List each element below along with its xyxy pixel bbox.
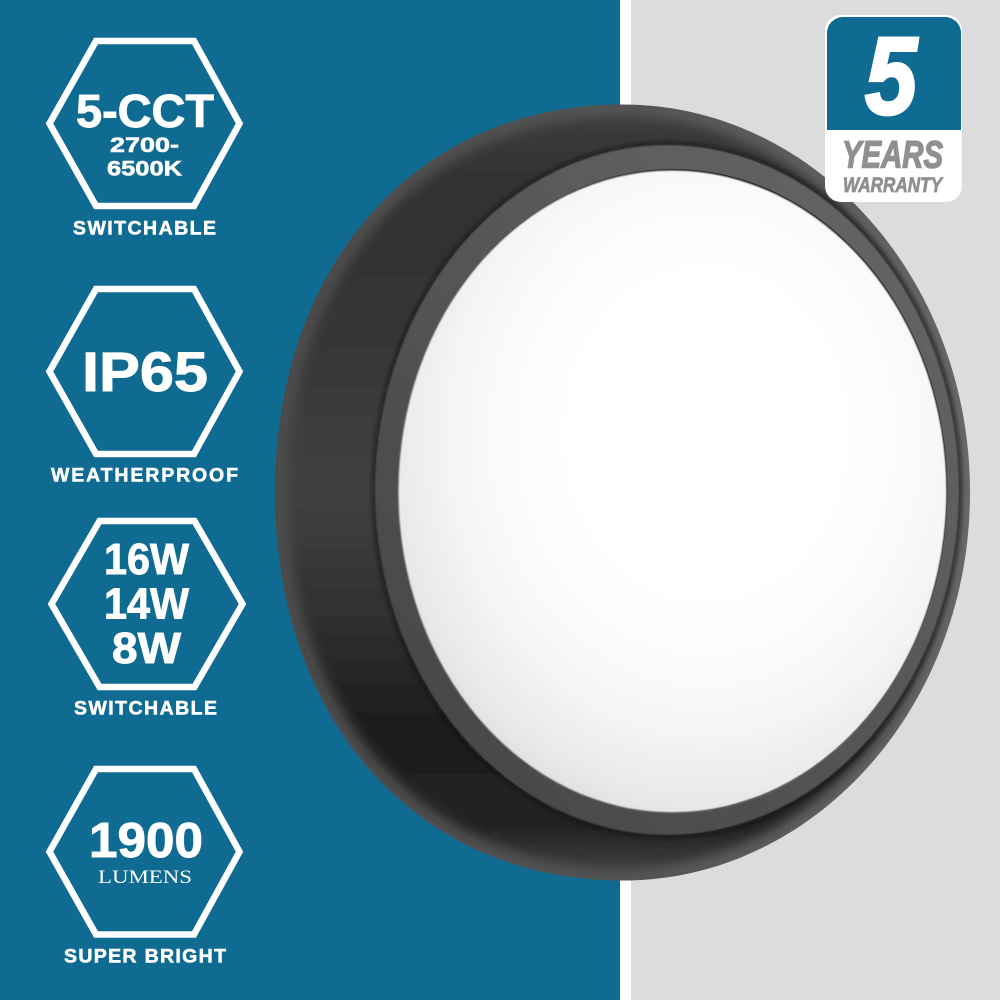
main value: IP65: [82, 340, 208, 403]
badge warranty: WARRANTY: [843, 174, 944, 197]
product image: round bulkhead light: [270, 100, 975, 885]
lamp bezel: [375, 145, 959, 835]
badge: 5 years warranty: [825, 15, 962, 202]
wattage 14W: 14W: [104, 580, 189, 628]
main value: 5-CCT: [76, 85, 214, 137]
unit: LUMENS: [98, 867, 192, 888]
badge years: YEARS: [842, 134, 943, 176]
caption: SUPER BRIGHT: [64, 946, 226, 968]
panel: grey background: [631, 0, 1000, 1000]
caption: SWITCHABLE: [74, 698, 217, 720]
colour range line 2: 6500K: [107, 158, 182, 180]
hexagon: [52, 521, 242, 687]
wattage 16W: 16W: [104, 535, 189, 584]
hexagon: [50, 41, 240, 206]
lamp lens edge line: [398, 169, 948, 813]
white divider strip: [620, 0, 631, 1000]
panel: blue background: [0, 0, 620, 1000]
wattage 8W: 8W: [112, 624, 181, 673]
colour range line 1: 2700-: [110, 134, 179, 157]
badge number: 5: [865, 15, 919, 138]
feature: IP65: [50, 289, 240, 486]
caption: WEATHERPROOF: [51, 464, 238, 486]
badge white card: [825, 15, 962, 202]
hexagon: [50, 289, 240, 454]
feature: wattage: [52, 521, 242, 720]
caption: SWITCHABLE: [73, 218, 216, 240]
lamp diffuser lens: [398, 170, 946, 812]
lamp housing: [270, 100, 975, 885]
main value: 1900: [89, 814, 203, 868]
feature: 5-CCT: [50, 41, 240, 240]
hexagon: [50, 769, 240, 934]
feature: lumens: [50, 769, 240, 968]
badge blue header: [827, 17, 961, 130]
